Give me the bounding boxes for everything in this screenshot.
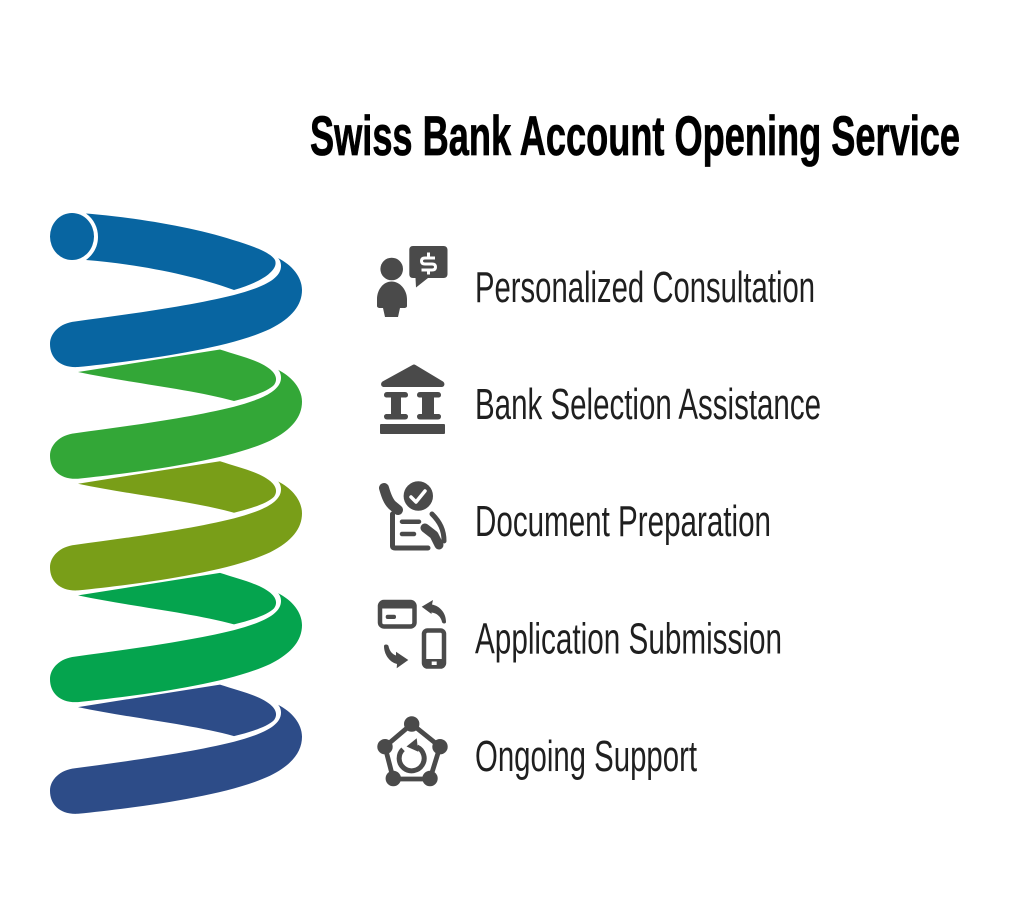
- icon: card and phone exchange: [380, 600, 446, 668]
- label: Ongoing Support: Ongoing Support: [475, 732, 697, 781]
- label: Personalized Consultation: Personalized Consultation: [475, 263, 815, 312]
- coil 4: emerald: [50, 573, 302, 702]
- icon: bank building: [380, 364, 445, 434]
- spiral graphic: [50, 213, 302, 814]
- icon: pentagon network with refresh arrow: [377, 716, 448, 786]
- coil 5: navy: [50, 685, 302, 814]
- icon: document with checkmark and hands: [384, 481, 444, 548]
- coil 1: blue: [50, 213, 302, 367]
- coil 3: olive: [50, 461, 302, 590]
- label: Bank Selection Assistance: Bank Selection Assistance: [475, 380, 821, 429]
- label: Application Submission: Application Submission: [475, 614, 782, 664]
- label: Document Preparation: Document Preparation: [475, 497, 771, 546]
- icon: person with dollar speech bubble: [377, 246, 448, 317]
- coil 2: green: [50, 350, 302, 479]
